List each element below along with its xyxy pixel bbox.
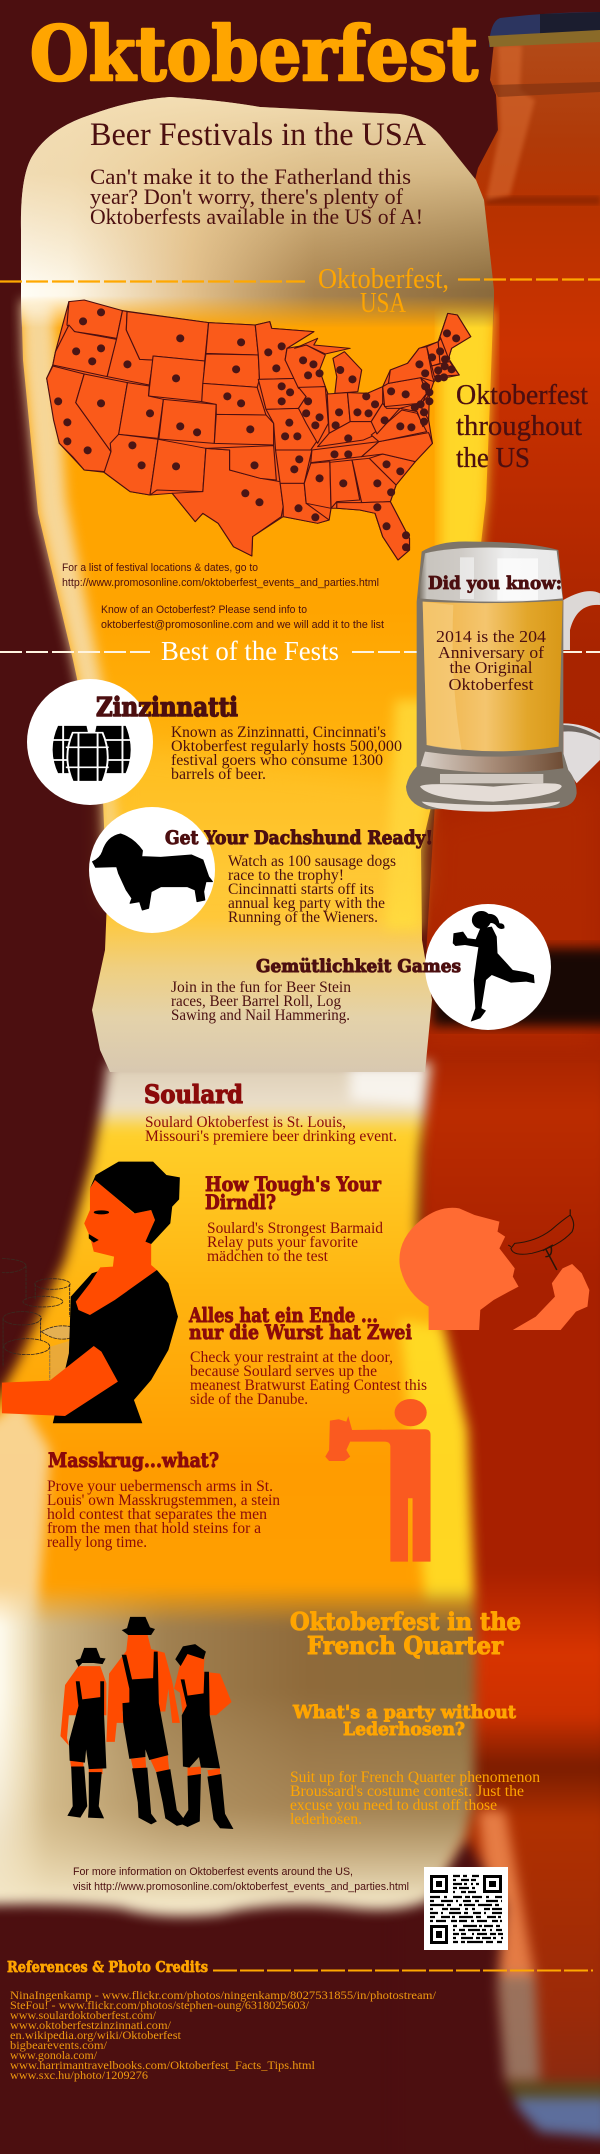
body text: [47, 1478, 280, 1551]
body text: meanest Bratwurst Eating Contest this: [190, 1377, 427, 1394]
body text: from the men that hold steins for a: [47, 1520, 261, 1537]
body text: [290, 1769, 540, 1828]
references list: en.wikipedia.org/wiki/Oktoberfest: [10, 2030, 182, 2042]
body text: because Soulard serves up the: [190, 1363, 377, 1380]
body text: [171, 979, 351, 1024]
more information note: For more information on Oktoberfest events around the US,: [73, 1866, 353, 1878]
icon: three men in lederhosen: [60, 1617, 233, 1829]
body text: Soulard Oktoberfest is St. Louis,: [145, 1114, 346, 1131]
panel: Gemütlichkeit Games: [171, 904, 551, 1030]
body text: really long time.: [47, 1534, 147, 1551]
background: beer foam: [21, 97, 494, 340]
QR code: [424, 1867, 508, 1950]
references list: bigbearevents.com/: [10, 2040, 108, 2052]
body text: Oktoberfest regularly hosts 500,000: [171, 738, 402, 755]
background: bottle top: [420, 12, 600, 1060]
references heading: References & Photo Credits: [7, 1958, 208, 1976]
map caption: Oktoberfest throughout the US: throughout: [456, 411, 582, 442]
heading: [205, 1172, 381, 1214]
mug: did you know: the Original: [450, 658, 533, 677]
section heading: Oktoberfest, USA: USA: [360, 288, 407, 319]
body text: barrels of beer.: [171, 766, 266, 783]
panel: Dachshund: [89, 807, 433, 933]
heading: Oktoberfest in the: [290, 1607, 521, 1636]
references list: www.harrimantravelbooks.com/Oktoberfest_Facts_Tips.html: [10, 2060, 315, 2072]
panel: Zinzinnatti: [27, 679, 402, 805]
heading: nur die Wurst hat Zwei: [189, 1320, 412, 1344]
heading: Masskrug...what?: [48, 1448, 219, 1472]
body text: [145, 1114, 397, 1145]
body text: excuse you need to dust off those: [290, 1797, 497, 1814]
subheading: [292, 1702, 517, 1740]
icon: barmaid with steins: [2, 1162, 180, 1423]
heading: Dirndl?: [205, 1190, 276, 1214]
panel: Soulard: [144, 1080, 397, 1145]
body text: Join in the fun for Beer Stein: [171, 979, 351, 996]
body text: mädchen to the test: [207, 1248, 329, 1265]
map caption: Oktoberfest throughout the US: [456, 380, 588, 474]
heading: [290, 1607, 521, 1660]
body text: [171, 724, 402, 783]
panel: Alles hat ein Ende: [188, 1303, 427, 1408]
background: bottle reflection: [395, 1050, 600, 2154]
body text: festival goers who consume 1300: [171, 752, 383, 769]
festival list note: For a list of festival locations & dates, go to: [62, 562, 258, 574]
heading: Soulard: [144, 1080, 243, 1109]
body text: Suit up for French Quarter phenomenon: [290, 1769, 540, 1786]
heading: Zinzinnatti: [96, 693, 238, 723]
festival list note: oktoberfest@promosonline.com and we will add it to the list: [101, 619, 384, 631]
references list: www.sxc.hu/photo/1209276: [10, 2070, 148, 2082]
body text: lederhosen.: [290, 1811, 362, 1828]
heading: [188, 1303, 412, 1344]
intro text: Oktoberfests available in the US of A!: [90, 204, 423, 229]
panel: Oktoberfest in the French Quarter: [290, 1607, 540, 1828]
panel: How Tough's Your Dirndl: [205, 1172, 383, 1265]
body text: Relay puts your favorite: [207, 1234, 358, 1251]
body text: races, Beer Barrel Roll, Log: [171, 993, 341, 1010]
subheading: Lederhosen?: [343, 1719, 465, 1740]
body text: Soulard's Strongest Barmaid: [207, 1220, 383, 1237]
references list: [10, 1990, 437, 2082]
map caption: Oktoberfest throughout the US: the US: [456, 443, 530, 474]
festival list note: Know of an Octoberfest? Please send info to: [101, 604, 307, 616]
body text: Running of the Wieners.: [228, 909, 378, 926]
references list: SteFou! - www.flickr.com/photos/stephen-oung/6318025603/: [10, 2000, 310, 2012]
section heading: Best of the Fests: Best of the Fests: [161, 636, 339, 666]
heading: Get Your Dachshund Ready!: [165, 827, 433, 849]
background: lower glass reflection: [0, 1062, 476, 1916]
body text: Cincinnatti starts off its: [228, 881, 374, 898]
intro text: Can't make it to the Fatherland this: [90, 164, 411, 189]
body text: Known as Zinzinnatti, Cincinnati's: [171, 724, 386, 741]
mug: did you know: Anniversary of: [438, 643, 544, 662]
festival list note: [62, 562, 384, 631]
icon: stick man lifting stein: [325, 1399, 431, 1562]
body text: Broussard's costume contest. Just the: [290, 1783, 524, 1800]
mug: did you know: [406, 541, 600, 812]
icon: barrels: [27, 679, 153, 805]
references list: www.gonola.com/: [10, 2050, 98, 2062]
references list: www.soulardoktoberfest.com/: [10, 2010, 157, 2022]
title: Oktoberfest: [30, 10, 478, 98]
mug: did you know: Oktoberfest: [448, 675, 534, 694]
body text: Prove your uebermensch arms in St.: [47, 1478, 273, 1495]
body text: [228, 853, 396, 926]
body text: hold contest that separates the men: [47, 1506, 267, 1523]
references list: NinaIngenkamp - www.flickr.com/photos/ningenkamp/8027531855/in/photostream/: [10, 1990, 437, 2002]
body text: race to the trophy!: [228, 867, 344, 884]
icon: man eating sausage: [399, 1208, 589, 1330]
more information note: visit http://www.promosonline.com/oktoberfest_events_and_parties.html: [73, 1881, 409, 1893]
body text: Watch as 100 sausage dogs: [228, 853, 396, 870]
body text: Missouri's premiere beer drinking event.: [145, 1128, 397, 1145]
section heading: Oktoberfest, USA: [0, 264, 600, 319]
subheading: What's a party without: [292, 1702, 517, 1723]
body text: annual keg party with the: [228, 895, 385, 912]
mug: did you know: Did you know:: [428, 573, 562, 594]
body text: [207, 1220, 383, 1265]
festival list note: http://www.promosonline.com/oktoberfest_events_and_parties.html: [62, 577, 379, 589]
references list: www.oktoberfestzinzinnati.com/: [10, 2020, 172, 2032]
body text: [190, 1349, 427, 1408]
body text: Louis' own Masskrugstemmen, a stein: [47, 1492, 280, 1509]
icon: dachshund: [89, 807, 215, 933]
body text: Check your restraint at the door,: [190, 1349, 393, 1366]
body text: side of the Danube.: [190, 1391, 308, 1408]
icon: running woman with stein: [425, 904, 551, 1030]
map caption: Oktoberfest throughout the US: Oktoberfest: [456, 380, 588, 411]
heading: French Quarter: [307, 1631, 503, 1660]
background: upper beer glass: [21, 290, 494, 1072]
intro text: [90, 164, 423, 229]
more information note: [73, 1866, 409, 1893]
mug: did you know: 2014 is the 204: [436, 627, 547, 646]
body text: Sawing and Nail Hammering.: [171, 1007, 350, 1024]
intro text: year? Don't worry, there's plenty of: [90, 184, 404, 209]
heading: How Tough's Your: [205, 1172, 381, 1196]
section heading: Oktoberfest, USA: Oktoberfest,: [318, 264, 449, 295]
US map with festival dots: [47, 300, 471, 560]
panel: Masskrug: [47, 1448, 280, 1551]
heading: Gemütlichkeit Games: [256, 956, 461, 977]
subtitle: Beer Festivals in the USA: [90, 117, 426, 153]
heading: Alles hat ein Ende ...: [188, 1303, 378, 1327]
